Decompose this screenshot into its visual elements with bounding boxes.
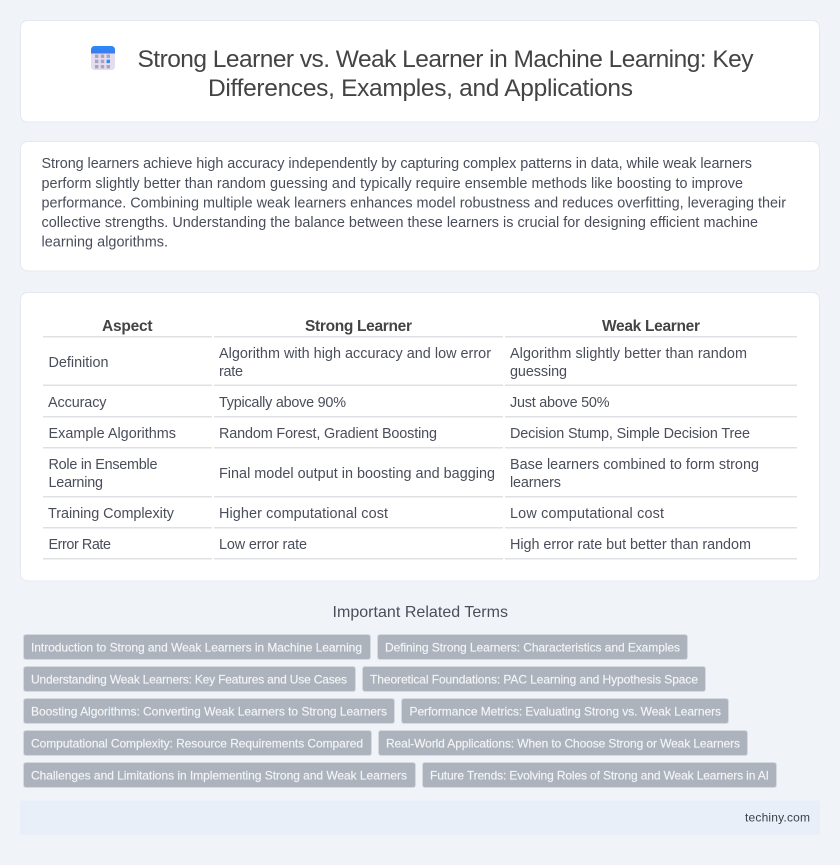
table row: definition: Algorithm slightly better than random <box>510 346 747 362</box>
table row: error rate: Error Rate <box>48 537 111 553</box>
tag: Boosting Algorithms: Converting Weak Learners to Strong Learners <box>31 704 387 718</box>
table row: accuracy: Typically above 90% <box>219 395 346 411</box>
tag <box>24 634 370 660</box>
title <box>138 46 754 102</box>
text block: introduction paragraph <box>42 156 786 250</box>
tag <box>362 666 706 692</box>
text block: introduction paragraph: collective strengths. Understanding the balance between these learners is crucial for designing efficient machine <box>42 215 758 231</box>
table row: definition <box>48 346 747 380</box>
table row: accuracy <box>48 395 610 411</box>
table header: Strong Learner <box>305 318 412 335</box>
tag: Performance Metrics: Evaluating Strong vs. Weak Learners <box>410 704 721 718</box>
table row: definition: Algorithm with high accuracy and low error <box>219 346 491 362</box>
table row: role in ensemble learning: learners <box>510 475 561 491</box>
table row: error rate <box>48 537 751 553</box>
table row: example algorithms <box>48 426 750 442</box>
table header: Weak Learner <box>602 318 700 335</box>
tag: Future Trends: Evolving Roles of Strong and Weak Learners in AI <box>430 768 769 782</box>
tag <box>378 730 748 756</box>
table row: definition: guessing <box>510 364 567 380</box>
table row: accuracy: Accuracy <box>48 395 107 411</box>
table row: example algorithms: Decision Stump, Simple Decision Tree <box>510 426 750 442</box>
table row: role in ensemble learning: Learning <box>48 475 103 491</box>
tag <box>402 698 728 724</box>
table row: training complexity: Training Complexity <box>48 506 175 522</box>
tag: Real-World Applications: When to Choose Strong or Weak Learners <box>386 736 740 750</box>
panel: related term tags <box>24 634 776 788</box>
icon: calendar <box>91 46 115 70</box>
tag: Challenges and Limitations in Implementing Strong and Weak Learners <box>31 768 407 782</box>
panel: header <box>20 20 820 122</box>
text block: introduction paragraph: learning algorithms. <box>42 234 168 250</box>
tag <box>24 698 394 724</box>
tag <box>422 762 776 788</box>
table row: definition: rate <box>219 364 243 380</box>
table row: training complexity: Higher computational cost <box>219 506 388 522</box>
footer: techiny.com <box>745 810 810 824</box>
text block: introduction paragraph: Strong learners achieve high accuracy independently by capturing complex patterns in data, while weak learners <box>42 156 752 172</box>
table row: error rate: High error rate but better than random <box>510 537 751 553</box>
tag <box>24 762 416 788</box>
table row: training complexity: Low computational cost <box>510 506 664 522</box>
text block: introduction paragraph: perform slightly better than random guessing and typically require ensemble methods like boosting to improve <box>42 176 743 192</box>
title: Strong Learner vs. Weak Learner in Machine Learning: Key <box>138 46 754 73</box>
table row: role in ensemble learning: Final model output in boosting and bagging <box>219 466 495 482</box>
panel: introduction <box>20 142 820 271</box>
table row: example algorithms: Random Forest, Gradient Boosting <box>219 426 437 442</box>
table row: training complexity <box>48 506 664 522</box>
tag <box>378 634 688 660</box>
tag: Introduction to Strong and Weak Learners in Machine Learning <box>31 640 362 654</box>
table header: Aspect <box>102 318 152 335</box>
table row: example algorithms: Example Algorithms <box>48 426 176 442</box>
tag: Computational Complexity: Resource Requirements Compared <box>31 736 363 750</box>
tag: Understanding Weak Learners: Key Features and Use Cases <box>31 672 347 686</box>
footer <box>20 800 820 835</box>
title: Differences, Examples, and Applications <box>208 75 633 102</box>
table row: definition: Definition <box>48 355 108 371</box>
heading: important related terms: Important Related Terms <box>332 604 508 621</box>
tag <box>24 730 372 756</box>
table row: role in ensemble learning <box>48 457 759 491</box>
tag <box>24 666 356 692</box>
table row: role in ensemble learning: Base learners combined to form strong <box>510 457 759 473</box>
panel: comparison table <box>20 292 820 581</box>
tag: Theoretical Foundations: PAC Learning and Hypothesis Space <box>370 672 698 686</box>
tag: Defining Strong Learners: Characteristics and Examples <box>385 640 680 654</box>
table header <box>102 318 700 335</box>
table row: role in ensemble learning: Role in Ensemble <box>48 457 158 473</box>
text block: introduction paragraph: performance. Combining multiple weak learners enhances model robustness and reduces overfitting, leveraging their <box>42 196 786 212</box>
table row: error rate: Low error rate <box>219 537 307 553</box>
table row: accuracy: Just above 50% <box>510 395 610 411</box>
